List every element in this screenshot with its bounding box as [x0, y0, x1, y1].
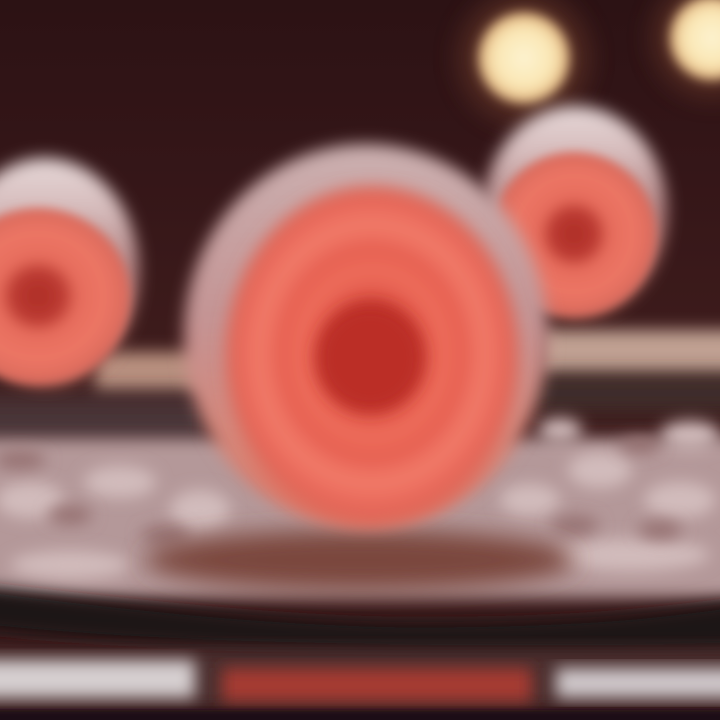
table: speckled pale surface — [0, 418, 720, 598]
reflection: lower strip — [0, 650, 720, 706]
table: dark grey band — [0, 378, 720, 444]
disc: left — [0, 158, 139, 386]
disc: centre — [184, 144, 548, 528]
table: pale back ledge — [95, 330, 720, 392]
table: black front edge — [0, 585, 720, 651]
lights: glowing bokeh lamps — [458, 0, 720, 124]
disc: right — [483, 106, 667, 318]
table: black bottom edge — [0, 710, 720, 720]
